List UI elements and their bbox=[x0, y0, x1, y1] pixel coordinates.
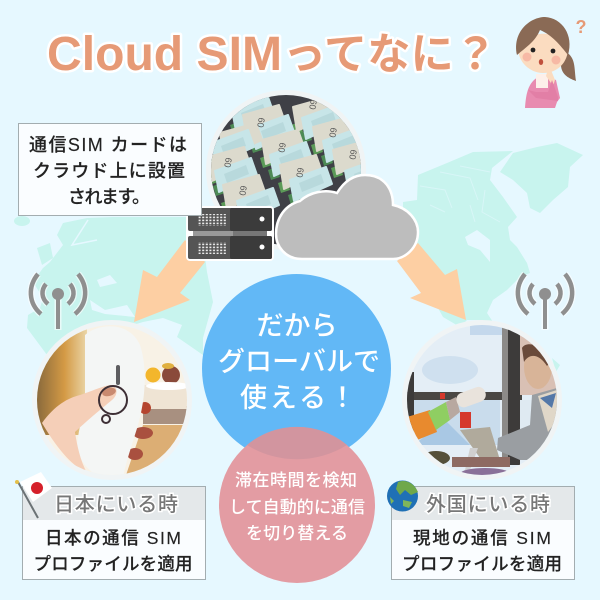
panel: pink circle note bbox=[219, 427, 375, 583]
icon: antenna right bbox=[518, 274, 572, 330]
panel: pink circle note: 滞在時間を検知 bbox=[235, 471, 357, 490]
photo: SIM cards: 60 bbox=[327, 127, 339, 138]
panel: abroad: 外国にいる時 bbox=[426, 493, 550, 516]
title: Cloud SIM bbox=[47, 28, 282, 81]
question mark: ? bbox=[576, 17, 586, 37]
panel: in Japan: 日本の通信 SIM bbox=[45, 528, 181, 548]
photo: device in hand bbox=[32, 320, 192, 480]
world map bbox=[14, 143, 583, 372]
photo: abroad bbox=[402, 320, 562, 480]
panel: blue circle message: グローバルで bbox=[218, 347, 380, 377]
title: ってなに？ bbox=[283, 31, 497, 79]
icon: server bbox=[186, 206, 274, 261]
panel: pink circle note: を切り替える bbox=[246, 524, 348, 543]
photo: SIM cards: 60 bbox=[255, 117, 267, 128]
icon: globe bbox=[387, 480, 418, 512]
title bbox=[47, 28, 497, 81]
arrow: to Japan bbox=[134, 240, 205, 322]
panel: abroad: 現地の通信 SIM bbox=[413, 528, 551, 548]
icon: Japan flag bbox=[15, 472, 52, 518]
callout: SIM cards in cloud: 通信SIM カードは bbox=[29, 135, 187, 155]
callout: SIM cards in cloud: されます。 bbox=[68, 187, 150, 207]
panel: blue circle message: だから bbox=[256, 311, 338, 341]
panel: abroad: プロファイルを適用 bbox=[402, 554, 562, 574]
photo: SIM cards: 60 bbox=[222, 157, 234, 168]
panel: pink circle note: して自動的に通信 bbox=[229, 498, 365, 517]
panel: in Japan: 日本にいる時 bbox=[54, 493, 178, 516]
arrow: to abroad bbox=[397, 243, 466, 320]
callout: SIM cards in cloud: クラウド上に設置 bbox=[33, 161, 185, 181]
icon: thinking woman bbox=[516, 17, 586, 108]
photo: SIM cards: 60 bbox=[276, 142, 288, 153]
icon: cloud bbox=[276, 175, 418, 259]
panel: blue circle message: 使える！ bbox=[240, 383, 356, 413]
photo: SIM cards: 60 bbox=[237, 185, 249, 196]
photo: SIM cards bbox=[206, 90, 366, 250]
panel: in Japan bbox=[22, 486, 206, 580]
photo: SIM cards: 60 bbox=[294, 167, 306, 178]
panel: in Japan: プロファイルを適用 bbox=[34, 554, 192, 574]
photo: SIM cards: 60 bbox=[347, 149, 359, 160]
panel: blue circle message bbox=[202, 274, 391, 463]
photo: SIM cards: 60 bbox=[307, 99, 319, 110]
callout: SIM cards in cloud bbox=[18, 124, 202, 216]
panel: abroad bbox=[392, 486, 574, 580]
icon: antenna left bbox=[31, 274, 85, 330]
